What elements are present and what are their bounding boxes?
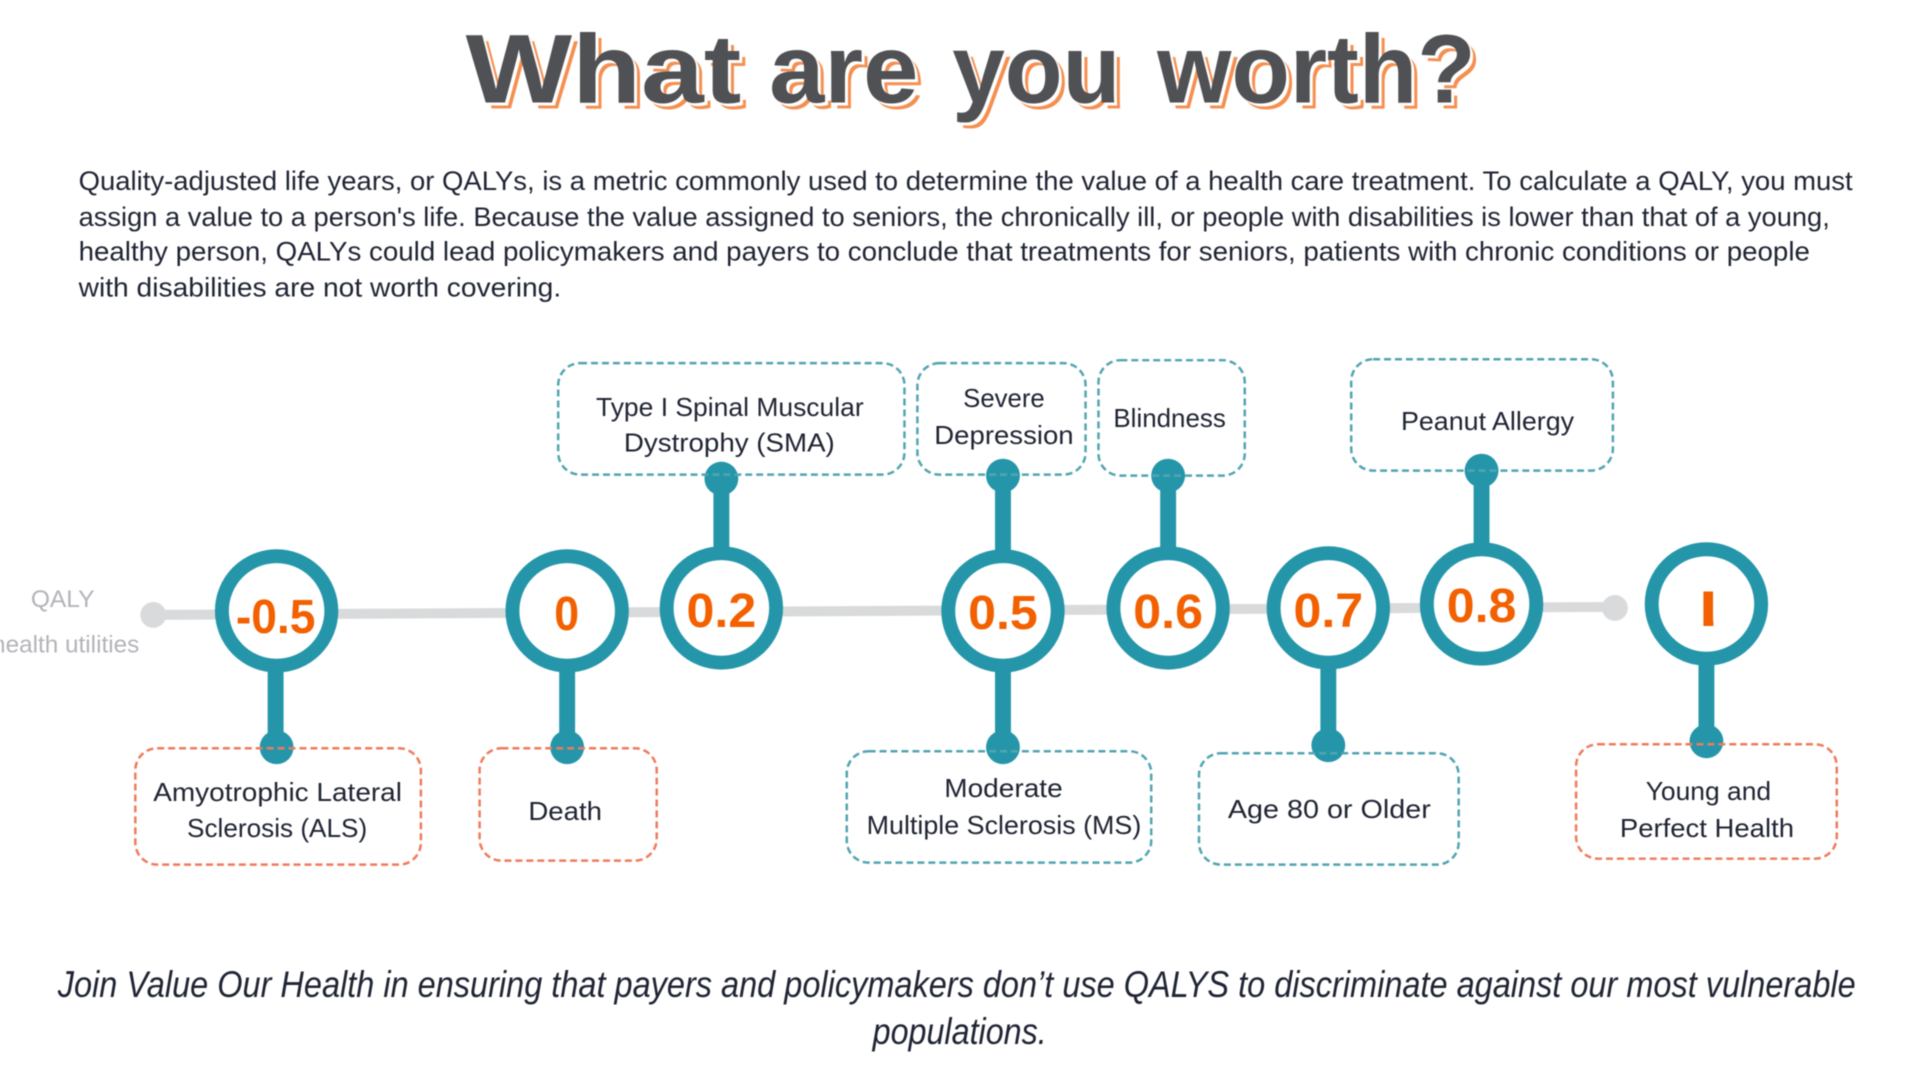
marker: 0 Death: 0 [554,588,579,641]
marker: -0.5 ALS: Amyotrophic Lateral [153,779,402,807]
marker: 0.7 Age 80 or Older [1199,553,1459,865]
marker: 0.2 SMA: Dystrophy (SMA) [624,430,835,458]
marker: -0.5 ALS: Sclerosis (ALS) [187,815,367,843]
intro paragraph: Quality-adjusted life years, or QALYs, is a metric commonly used to determine the value of a health care treatment. To calculate a QALY, you must [79,166,1853,196]
marker: 1 Young and Perfect Health: 1 [1685,581,1727,637]
marker: 1 Young and Perfect Health [1576,549,1837,859]
marker: 0.2 SMA: Type I Spinal Muscular [596,394,864,422]
marker: 0.8 Peanut Allergy: 0.8 [1447,580,1516,633]
axis label: QALY [31,586,95,613]
marker: 0.7 Age 80 or Older: Age 80 or Older [1228,796,1431,824]
marker: 0.5 Severe Depression and Moderate MS: 0.5 [968,587,1038,640]
marker: 0.5 Severe Depression and Moderate MS: Moderate [944,775,1063,803]
title: worth? [1156,14,1476,123]
marker: 0.5 Severe Depression and Moderate MS: Severe [963,385,1045,413]
marker: -0.5 ALS [135,556,421,865]
title [466,14,1476,123]
marker: 0.8 Peanut Allergy: Peanut Allergy [1401,408,1574,436]
marker: 0.7 Age 80 or Older: 0.7 [1294,585,1363,638]
marker: 0.8 Peanut Allergy [1351,359,1613,659]
marker: 0.5 Severe Depression and Moderate MS: Multiple Sclerosis (MS) [867,812,1141,840]
marker: 0.2 SMA [558,363,904,663]
intro paragraph: healthy person, QALYs could lead policymakers and payers to conclude that treatments for seniors, patients with chronic conditions or people [79,237,1810,267]
title: are [769,14,918,123]
marker: 0.5 Severe Depression and Moderate MS: Depression [934,422,1074,450]
timeline axis [140,595,1628,628]
marker: 0.6 Blindness [1098,360,1245,663]
intro paragraph [78,166,1853,303]
intro paragraph: with disabilities are not worth covering. [78,273,561,303]
call to action: populations. [872,1011,1047,1052]
marker: 0.6 Blindness: Blindness [1113,405,1226,433]
marker: 1 Young and Perfect Health: Young and [1646,778,1771,806]
intro paragraph: assign a value to a person's life. Because the value assigned to seniors, the chronically ill, or people with disabilities is lower than that of a young, [79,202,1830,232]
marker: 0 Death: Death [528,798,602,826]
title: What [466,14,741,123]
marker: 0 Death [480,556,657,861]
title: you [952,14,1120,123]
marker: 0.2 SMA: 0.2 [687,585,756,638]
marker: 0.5 Severe Depression and Moderate MS [847,363,1151,863]
axis label [0,586,139,659]
marker: 0.6 Blindness: 0.6 [1133,586,1203,639]
call to action [57,964,1856,1052]
marker: 1 Young and Perfect Health: Perfect Health [1620,815,1794,843]
marker: -0.5 ALS: -0.5 [236,591,315,644]
